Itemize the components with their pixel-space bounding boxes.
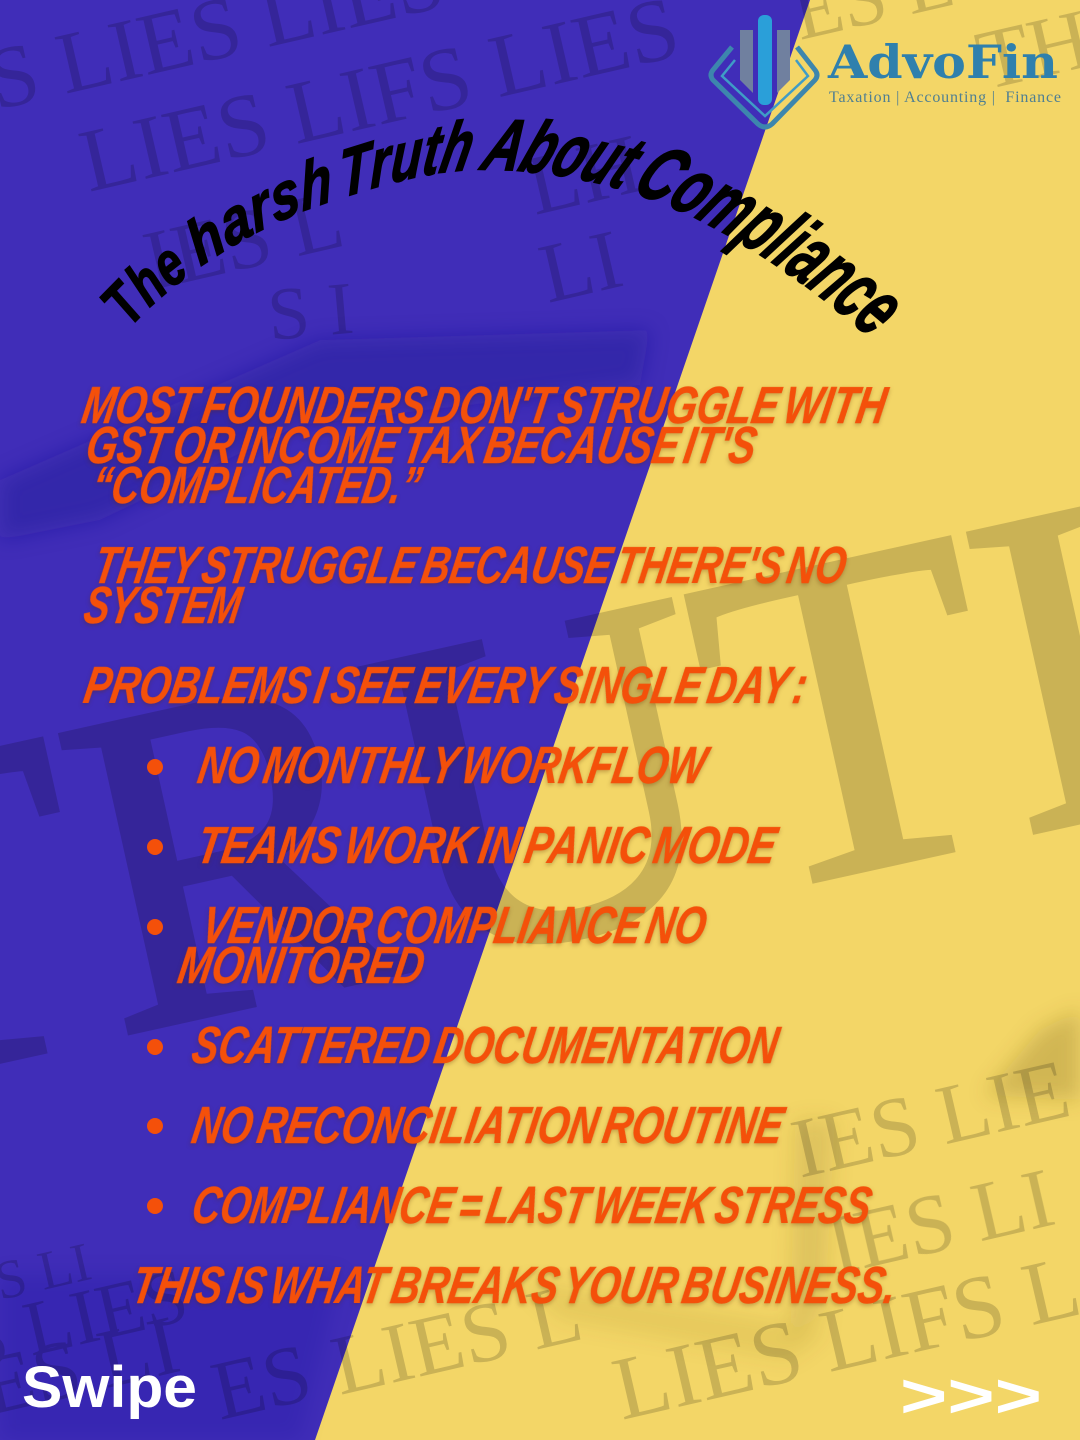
bullet: no monthly workflow: NO MONTHLY WORKFLOW bbox=[194, 737, 715, 795]
title: curved heading: Truth bbox=[342, 118, 473, 196]
title: curved heading: About bbox=[476, 118, 646, 189]
logo tagline: Taxation | Accounting | Finance bbox=[829, 89, 1061, 106]
background: newspaper ghost words: IES L bbox=[135, 172, 352, 309]
text block: no system bbox=[80, 537, 851, 635]
text block: problems heading: PROBLEMS I SEE EVERY SINGLE DAY : bbox=[80, 657, 812, 715]
logo: AdvoFin bbox=[711, 15, 1061, 127]
background: newspaper ghost words: ES bbox=[203, 1326, 320, 1439]
bullet: vendor compliance: MONITORED bbox=[174, 937, 429, 995]
text block: no system: SYSTEM bbox=[80, 577, 247, 635]
bullet: no reconciliation: NO RECONCILIATION ROUTINE bbox=[188, 1097, 790, 1155]
background: newspaper ghost words: LH bbox=[518, 116, 650, 234]
icon: chart bars in diamond bbox=[711, 15, 817, 127]
bullet: vendor compliance: VENDOR COMPLIANCE NO bbox=[198, 897, 711, 955]
background: yellow diagonal panel bbox=[315, 0, 1080, 1440]
bullet list: problems bbox=[147, 737, 876, 1235]
bullet: last week stress: COMPLIANCE = LAST WEEK STRESS bbox=[188, 1177, 876, 1235]
background: newspaper ghost words: S I bbox=[264, 267, 357, 357]
background: newspaper ghost words: LIES L bbox=[323, 1265, 590, 1414]
logo wordmark: AdvoFin bbox=[827, 35, 1058, 89]
arrows: next page: >>> bbox=[900, 1362, 1042, 1431]
background: newspaper ghost words: IES LI bbox=[818, 1150, 1062, 1294]
background: newspaper ghost words: LIES LIFS L bbox=[604, 1236, 1080, 1439]
background: newspaper ghost words: IES LIE bbox=[783, 1042, 1078, 1197]
bullet: panic mode: TEAMS WORK IN PANIC MODE bbox=[193, 817, 783, 875]
title: curved heading: harsh bbox=[186, 156, 330, 267]
title: curved heading bbox=[99, 118, 898, 332]
text block: intro: GST OR INCOME TAX BECAUSE IT'S bbox=[82, 417, 761, 475]
bullet: vendor compliance bbox=[147, 897, 711, 995]
background: newspaper ghost words: LI bbox=[531, 212, 630, 322]
title: curved heading: Compliance bbox=[638, 150, 898, 332]
text block: intro: “COMPLICATED.” bbox=[88, 457, 427, 515]
swipe label: Swipe bbox=[22, 1355, 197, 1420]
title: curved heading: The bbox=[99, 250, 185, 323]
bullet: scattered documentation: SCATTERED DOCUMENTATION bbox=[188, 1017, 784, 1075]
text block: intro bbox=[78, 377, 892, 515]
